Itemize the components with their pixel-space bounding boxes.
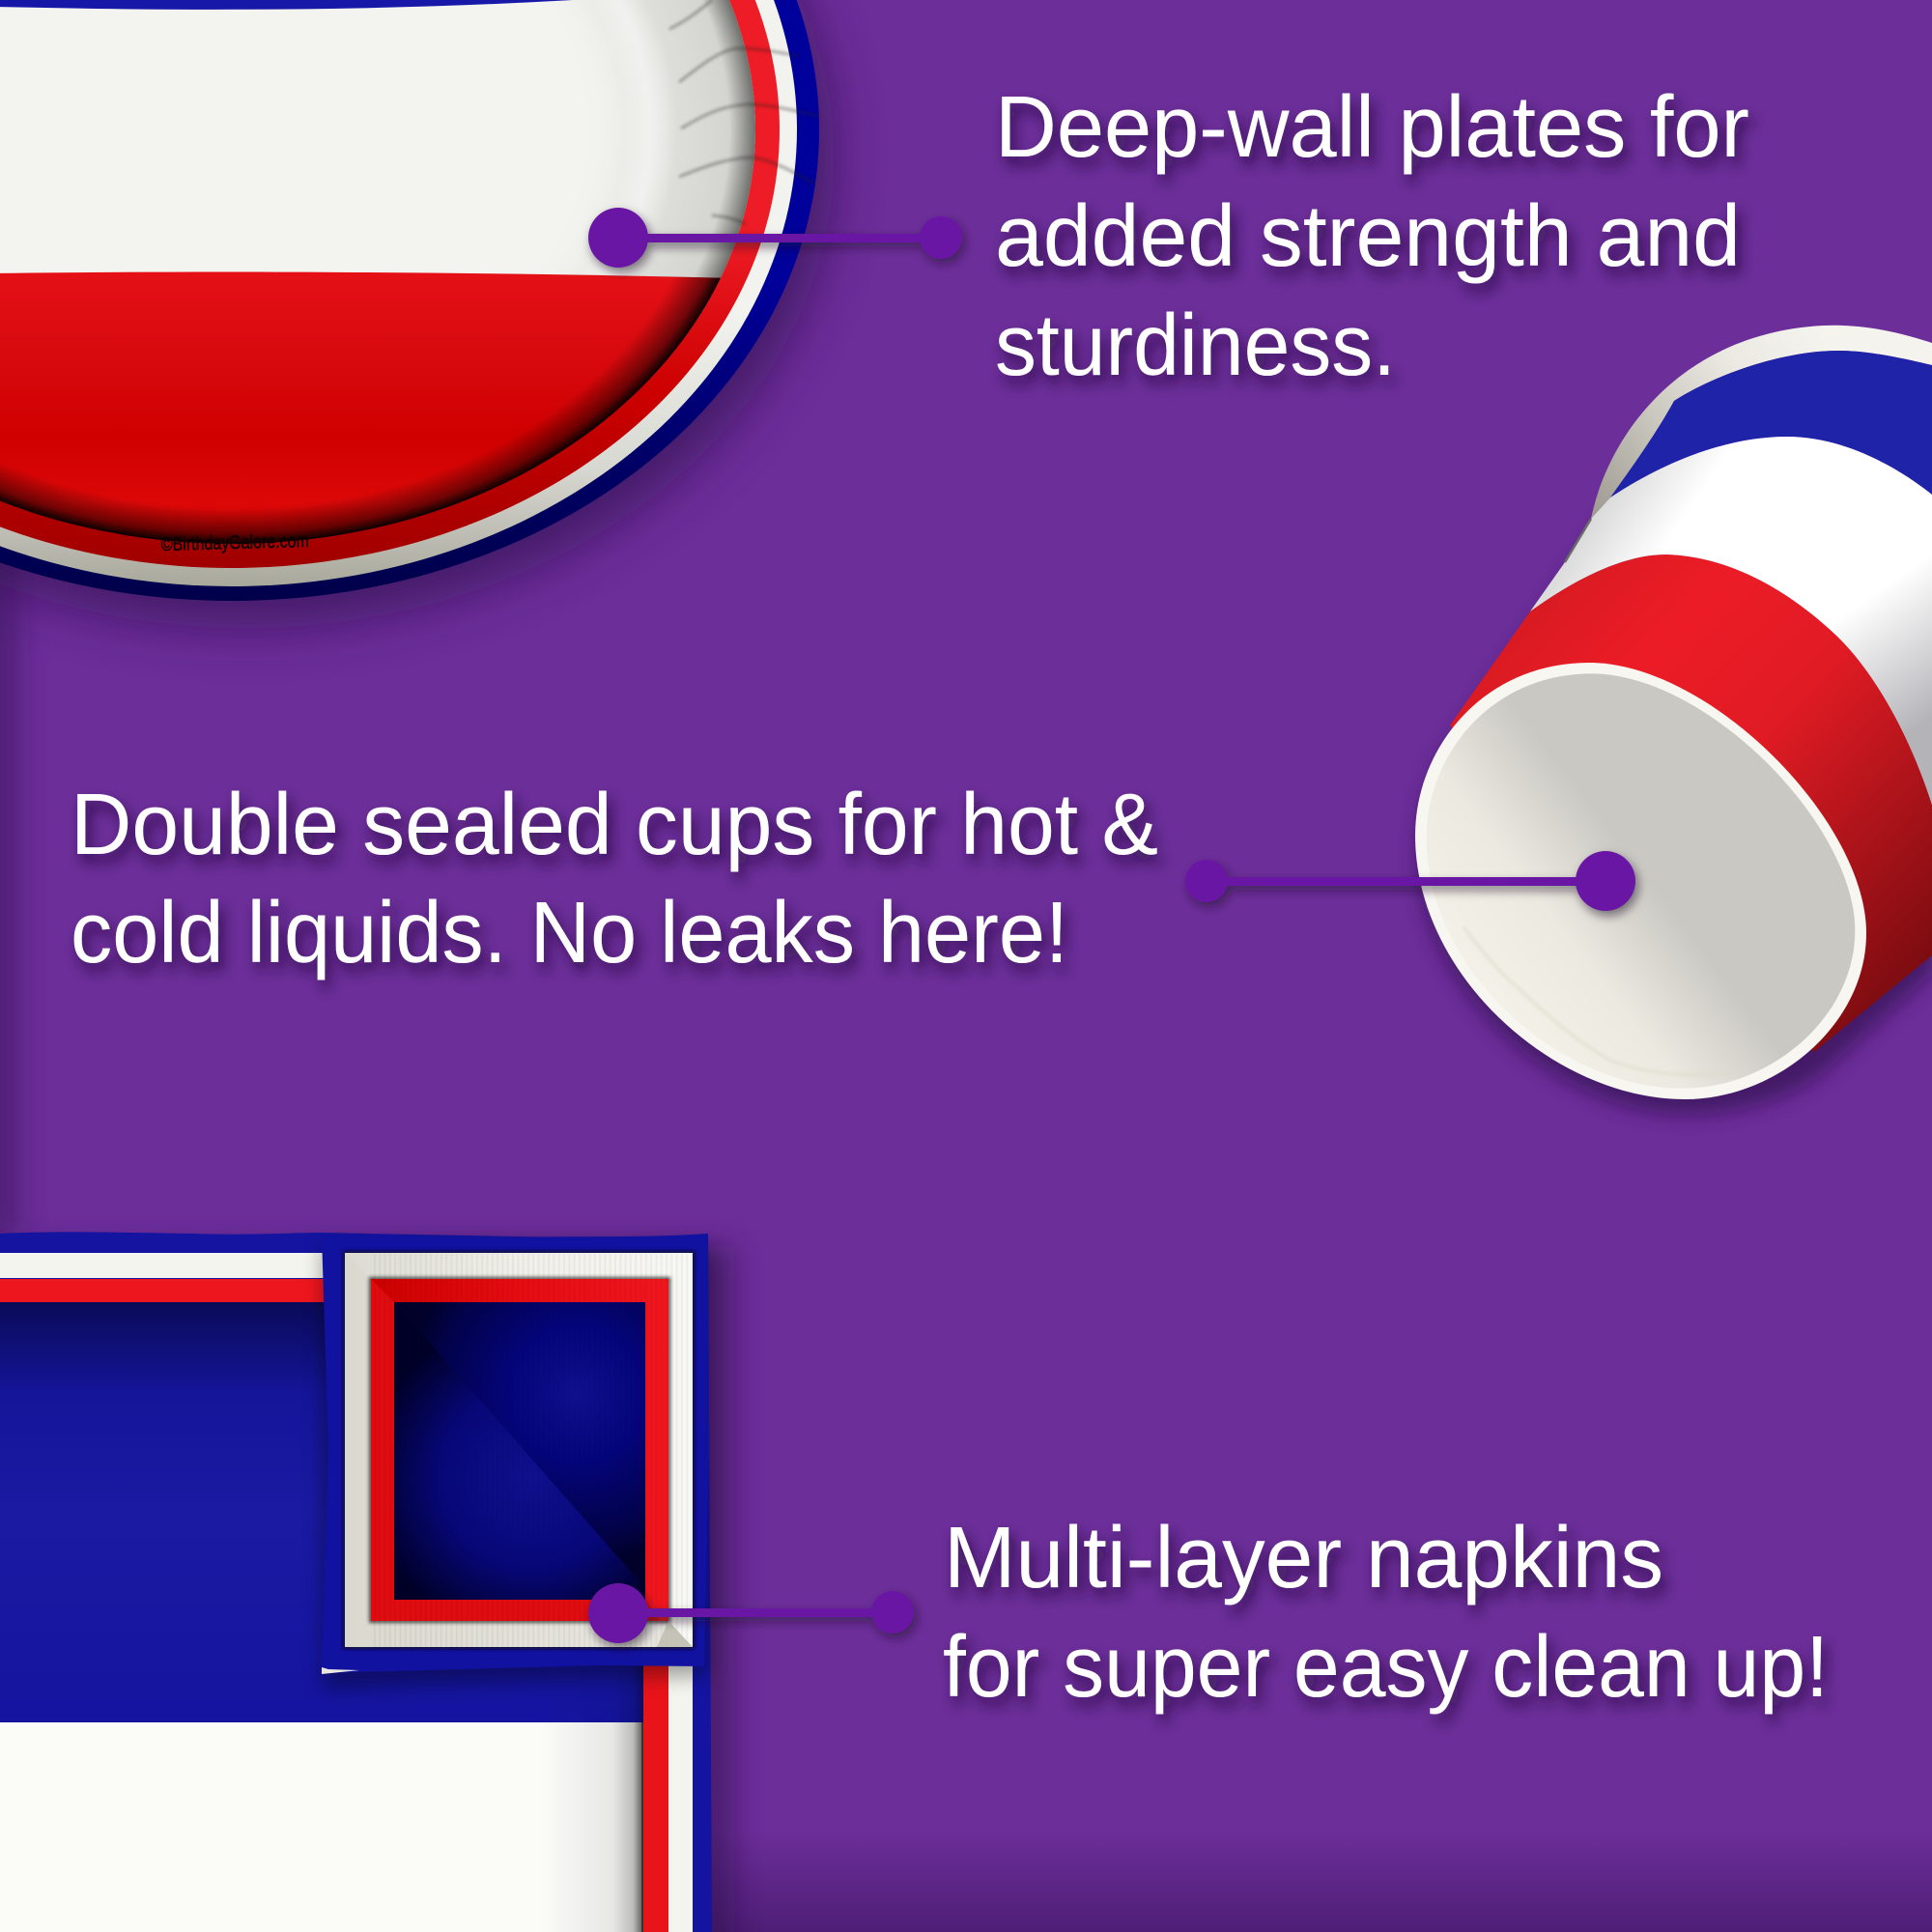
plate rim: red band [0,0,780,568]
cup white band [1530,437,1932,805]
plate well stripes [0,0,773,580]
plate rim: white band [0,0,797,586]
folded corner [322,1234,709,1689]
plate shadow [0,0,834,628]
napkin right red stripe [643,1642,668,1932]
text: plate description: added strength and [995,188,1741,285]
text: napkin description: Multi-layer napkins [944,1510,1663,1606]
napkin shadow [0,1246,734,1932]
cup side edge [1565,519,1591,562]
plate watermark: ©BirthdayGalore.com [161,530,309,555]
text: napkin description: for super easy clean up! [943,1619,1829,1716]
corner dark edge of red frame [371,1279,668,1621]
corner white frame [345,1253,693,1647]
corner white sliver [322,1667,359,1674]
callout: cup pointer [1185,851,1635,911]
cup base rim [1415,663,1866,1099]
text: plate description: Deep-wall plates for [995,79,1749,176]
text: napkin description [943,1510,1829,1716]
corner red frame [371,1279,668,1621]
corner fold on white frame [345,1253,693,1647]
napkin [0,1232,734,1932]
cup red band [1450,554,1932,1052]
napkin right white stripe [668,1642,693,1932]
corner fold on red frame [371,1279,660,1621]
napkin top red stripe [0,1279,333,1302]
plate rim: blue band [0,0,819,601]
callout: plate pointer [588,208,962,268]
plate creases [669,0,818,224]
text: plate description [995,79,1749,394]
cup base floor [1427,673,1855,1089]
corner pleats [371,1254,693,1648]
text: cup description: cold liquids. No leaks here! [71,885,1068,981]
cup [1415,326,1932,1115]
corner shadow [323,1246,708,1689]
cup white band shading [1835,454,1932,805]
napkin white panel [0,1722,642,1932]
corner tip [657,1621,693,1647]
napkin blue panel [0,1302,643,1722]
text: cup description: Double sealed cups for hot & [71,777,1158,873]
corner blue backing [322,1234,709,1673]
plate [0,0,834,628]
napkin top white stripe [0,1253,333,1278]
callout: napkin pointer [588,1583,914,1643]
cup shadow [1418,498,1932,1115]
cup blue band [1610,351,1932,497]
text: cup description [71,777,1158,981]
corner pocket [394,1302,645,1600]
cup base crease [1463,927,1741,1075]
cup rim [1591,326,1932,519]
napkin body [0,1232,712,1932]
corner dark edge of white frame [345,1253,693,1647]
corner fold [394,1302,645,1600]
text: plate description: sturdiness. [995,298,1396,394]
